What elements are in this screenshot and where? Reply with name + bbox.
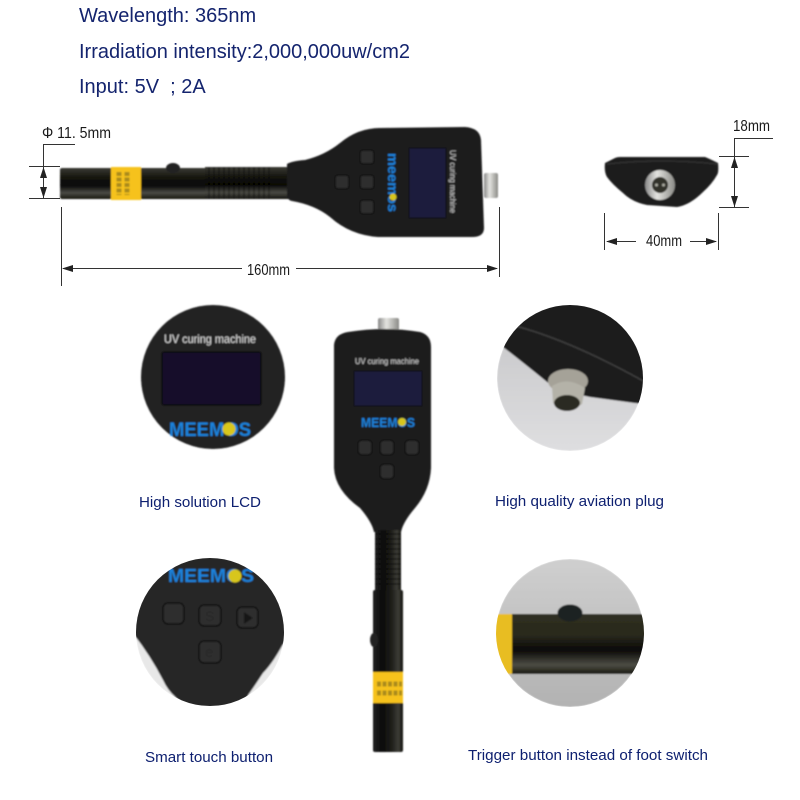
logo: MEEMOS bbox=[169, 420, 251, 441]
LCD screen bbox=[354, 371, 422, 406]
LCD screen bbox=[409, 148, 446, 218]
connector bbox=[378, 318, 399, 333]
handle body bbox=[334, 329, 431, 532]
buttons bbox=[358, 440, 419, 479]
trigger button bbox=[370, 633, 378, 647]
logo: meemos bbox=[385, 153, 400, 212]
logo: MEEMOS bbox=[361, 416, 415, 430]
specification text block: Wavelength: 365nm bbox=[79, 5, 256, 27]
LCD screen bbox=[162, 352, 261, 405]
buttons bbox=[335, 150, 374, 214]
buttons: S bbox=[205, 608, 214, 624]
product name: UV curing machine bbox=[164, 332, 256, 346]
logo: MEEMOS bbox=[168, 566, 254, 586]
specification text block: Input: 5V ; 2A bbox=[79, 76, 206, 98]
detail circle: trigger button bbox=[495, 559, 647, 707]
product name: UV curing machine bbox=[448, 150, 458, 213]
device tube bbox=[60, 168, 210, 199]
dimension: diameter: Φ 11. 5mm bbox=[42, 125, 111, 142]
detail circle: aviation plug bbox=[497, 305, 643, 451]
horizontal device photo bbox=[60, 127, 498, 237]
end view of device bbox=[605, 157, 718, 207]
specification text block: Irradiation intensity:2,000,000uw/cm2 bbox=[79, 41, 410, 63]
connector bbox=[484, 173, 498, 198]
dimension: length bbox=[62, 207, 500, 286]
vertical device photo bbox=[334, 318, 431, 752]
dimension: length: 160mm bbox=[247, 262, 290, 279]
trigger button bbox=[166, 163, 180, 173]
product name: UV curing machine bbox=[355, 356, 419, 366]
device tube bbox=[373, 590, 403, 752]
dimension: width: 40mm bbox=[646, 233, 682, 250]
yellow label bbox=[373, 672, 403, 703]
trigger bbox=[558, 604, 582, 622]
buttons: e bbox=[205, 644, 213, 661]
detail circle: LCD bbox=[141, 305, 285, 449]
caption: LCD: High solution LCD bbox=[139, 495, 261, 511]
dimension: height bbox=[719, 118, 773, 208]
detail circle: touch buttons bbox=[136, 558, 284, 706]
dimension: diameter bbox=[29, 125, 111, 198]
specification text block bbox=[79, 5, 410, 98]
caption: trigger button: Trigger button instead of foot switch bbox=[468, 748, 708, 764]
connector end bbox=[645, 170, 675, 200]
gooseneck bbox=[205, 167, 289, 199]
yellow label bbox=[111, 167, 141, 200]
caption: touch buttons: Smart touch button bbox=[145, 750, 273, 766]
dimension: width bbox=[604, 213, 718, 250]
caption: aviation plug: High quality aviation plug bbox=[495, 494, 664, 510]
buttons bbox=[163, 603, 258, 663]
gooseneck bbox=[375, 530, 401, 640]
plug connector bbox=[548, 369, 588, 411]
handle body bbox=[287, 127, 484, 237]
dimension: height: 18mm bbox=[733, 118, 770, 135]
